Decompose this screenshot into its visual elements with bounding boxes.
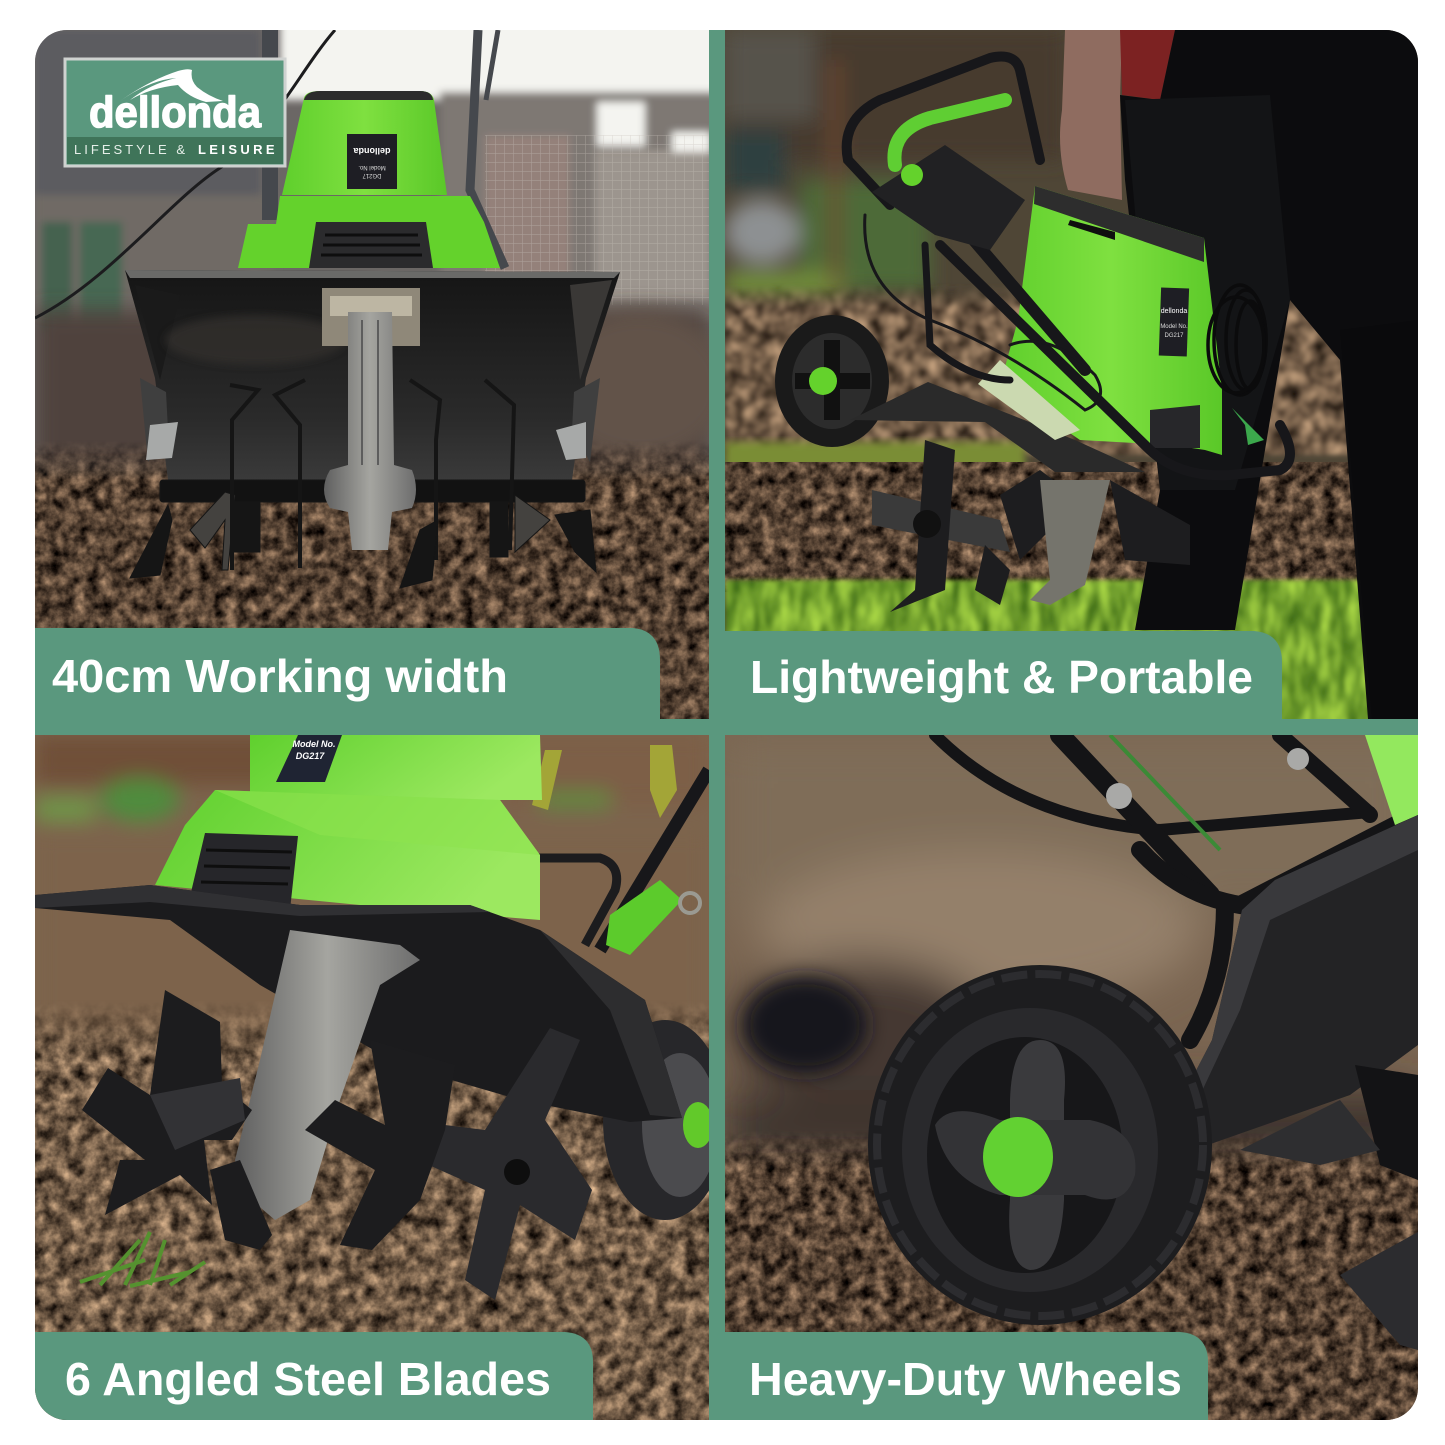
vent: [309, 222, 433, 268]
panel: lightweight and portable photo: [724, 30, 1418, 725]
shield panel: [1160, 815, 1418, 1160]
soil foreground: [725, 1130, 1418, 1425]
big wheel: [868, 965, 1212, 1325]
caption: lightweight and portable: [709, 631, 1282, 725]
caption: heavy-duty wheels: [709, 1332, 1208, 1420]
coiled cable: [1208, 285, 1266, 395]
motor housing: [238, 91, 500, 268]
blades: [82, 990, 592, 1300]
frame and shield: [935, 735, 1418, 1350]
tiller held upright: [775, 56, 1290, 612]
model label: Model No.: [358, 164, 386, 170]
shield: [125, 270, 620, 480]
caption: 6 angled steel blades: 6 Angled Steel Blades: [65, 1353, 551, 1405]
body: [978, 186, 1222, 455]
caption: 40cm working width: 40cm Working width: [52, 650, 508, 702]
green housing corner: [1365, 735, 1418, 825]
shield: [35, 885, 682, 1122]
bolts: [1106, 783, 1132, 809]
model label: [276, 735, 342, 782]
handle and rear wheel: [532, 745, 709, 1220]
gearbox: [235, 930, 420, 1220]
body: DG217: [1164, 333, 1184, 339]
logo: dellonda lifestyle and leisure: [65, 59, 285, 166]
grass band: [725, 442, 1025, 470]
motor housing: [155, 735, 542, 920]
tiller side view: [35, 735, 727, 1300]
body: Model No.: [1160, 324, 1188, 330]
panel: heavy-duty wheels photo: [725, 735, 1418, 1425]
dark clod: [743, 977, 867, 1073]
control box: [872, 145, 1025, 250]
cable: [35, 30, 335, 318]
caption: lightweight and portable: Lightweight & Portable: [750, 651, 1253, 703]
shield flat: [850, 382, 1145, 472]
grass foreground: [725, 580, 1418, 725]
panel: 40cm working width photo: [35, 20, 730, 725]
background: sky and building: [35, 30, 709, 320]
gearbox: [322, 288, 420, 550]
handle poles: [270, 30, 505, 268]
model label: Model No.: [292, 739, 336, 749]
soil foreground: [35, 440, 709, 725]
tines: [872, 440, 1190, 612]
green hub: [983, 1117, 1053, 1197]
vent: [192, 833, 298, 904]
caption: 6 angled steel blades: [35, 1332, 593, 1420]
right blades: [395, 1028, 592, 1300]
icon: wave: [120, 69, 223, 102]
model label: DG217: [362, 172, 382, 178]
logo: dellonda lifestyle and leisure: dellonda: [89, 88, 261, 137]
caption: heavy-duty wheels: Heavy-Duty Wheels: [749, 1353, 1182, 1405]
soil mid ground: [725, 462, 1418, 592]
logo: dellonda lifestyle and leisure: LEISURE: [198, 142, 277, 157]
grass tuft: [80, 1232, 205, 1286]
soil mound: [725, 285, 1418, 455]
model label: dellonda: [353, 146, 391, 156]
handle frame: [847, 56, 1290, 475]
rear wheel: [775, 315, 889, 447]
body: dellonda: [1161, 308, 1187, 315]
caption: 40cm working width: [35, 628, 660, 725]
tiller front view: [125, 30, 620, 588]
model label: DG217: [296, 751, 325, 761]
model label: [347, 134, 397, 189]
left blades: [82, 990, 252, 1215]
logo: dellonda lifestyle and leisure: LIFESTYLE &: [74, 142, 188, 157]
tines and axle: [130, 380, 596, 588]
panel: angled steel blades photo: [35, 735, 727, 1425]
person: [1060, 30, 1418, 719]
